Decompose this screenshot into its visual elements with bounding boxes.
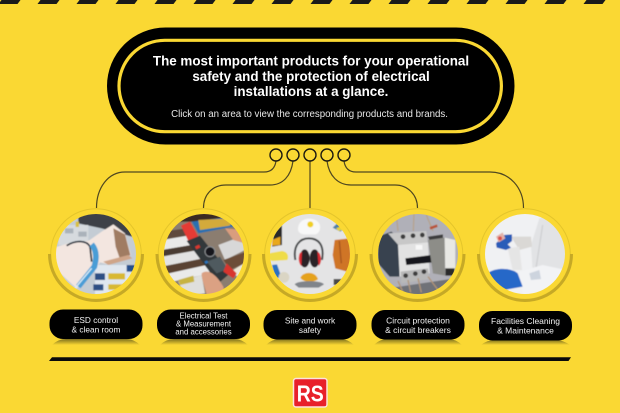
label: Circuit protection <box>372 310 464 340</box>
area: ESD control <box>45 205 145 305</box>
hazard stripe band <box>0 0 606 4</box>
label: Circuit protection: & circuit breakers <box>385 325 451 335</box>
label: Electrical test <box>157 310 250 339</box>
label: ESD control: ESD control <box>74 315 118 325</box>
label: Site and work safety: Site and work <box>285 316 336 326</box>
label: Electrical test: Electrical Test <box>180 312 228 320</box>
pill shadows <box>52 339 570 345</box>
label: Electrical test: & Measurement <box>176 320 232 328</box>
label: Circuit protection: Circuit protection <box>386 316 450 326</box>
label: Facilities cleaning: Facilities Cleaning <box>491 316 560 326</box>
heading: The most important products for your operational <box>153 54 469 68</box>
instruction text: Click on an area to view the corresponding products and brands. <box>171 109 448 120</box>
photo: clamp meter <box>164 214 244 294</box>
photo: wrist strap <box>56 214 136 294</box>
photo: protective suit <box>485 214 565 294</box>
RS logo: RS <box>297 380 324 406</box>
photo: circuit breakers <box>378 214 458 294</box>
area: Electrical test <box>155 205 255 305</box>
label: ESD control: & clean room <box>72 324 121 334</box>
label: ESD control <box>50 310 142 339</box>
area: Facilities cleaning <box>476 205 576 305</box>
heading: safety and the protection of electrical <box>192 69 430 84</box>
area: Site and work safety <box>262 205 362 305</box>
connector lines <box>96 161 524 208</box>
label: Electrical test: and accessories <box>175 328 232 336</box>
label: Facilities cleaning: & Maintenance <box>497 326 554 336</box>
headline panel <box>107 28 514 144</box>
label: Site and work safety: safety <box>299 325 322 335</box>
heading: installations at a glance. <box>234 84 388 99</box>
divider bar <box>49 357 571 361</box>
label: Facilities cleaning <box>479 311 572 340</box>
photo: protective equipment <box>270 214 350 294</box>
selector circles <box>270 149 350 161</box>
label: Site and work safety <box>264 310 356 340</box>
area: Circuit protection <box>368 205 468 305</box>
